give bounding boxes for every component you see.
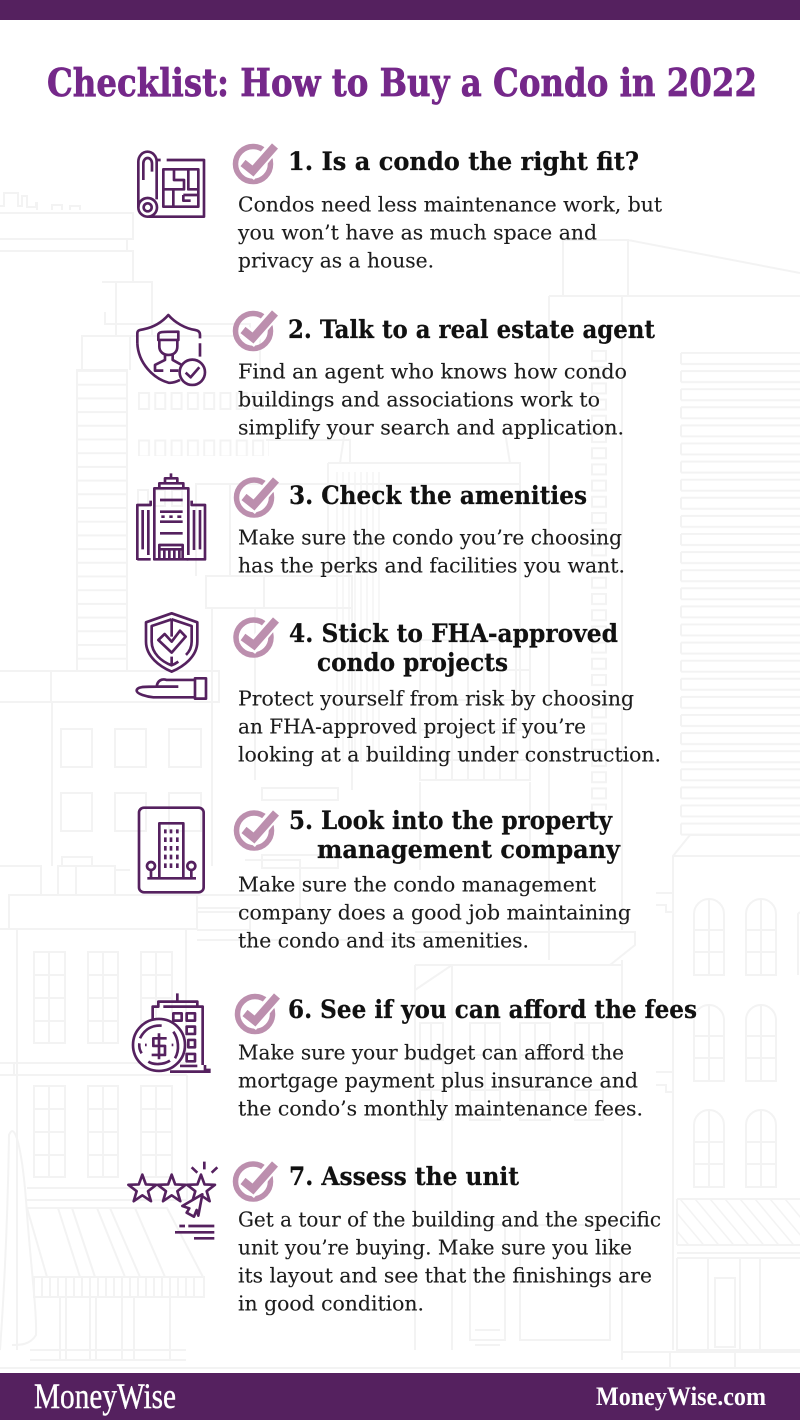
item 2: talk to a real estate agent <box>137 313 655 440</box>
icon: building in rounded frame <box>139 808 204 892</box>
body text: Make sure the condo management <box>238 872 597 896</box>
body text: the condo and its amenities. <box>238 928 529 952</box>
check mark <box>236 480 276 515</box>
body text: in good condition. <box>238 1292 424 1316</box>
body text <box>237 192 663 272</box>
top bar <box>0 0 800 20</box>
item 6: see if you can afford the fees <box>133 993 697 1120</box>
heading <box>289 806 621 864</box>
body text <box>238 360 627 440</box>
check mark <box>236 1164 275 1199</box>
item 1: is a condo the right fit <box>138 146 663 272</box>
icon: shield with agent <box>137 315 205 385</box>
body text: Make sure your budget can afford the <box>238 1040 624 1064</box>
body text: its layout and see that the finishings are <box>238 1264 652 1288</box>
logo: MoneyWise: MoneyWise <box>34 1376 176 1416</box>
body text: buildings and associations work to <box>238 388 600 412</box>
body text: an FHA-approved project if you’re <box>238 714 586 738</box>
item 5: look into the property management company <box>139 806 631 952</box>
check mark <box>236 146 275 182</box>
body text: you won’t have as much space and <box>237 220 597 244</box>
body text: Make sure the condo you’re choosing <box>238 526 622 550</box>
heading: management company <box>317 835 621 864</box>
body text: looking at a building under construction. <box>238 742 661 766</box>
check mark <box>238 996 277 1032</box>
website: MoneyWise.com: MoneyWise.com <box>596 1382 766 1411</box>
body text <box>238 686 661 766</box>
heading: 7. Assess the unit <box>289 1162 519 1191</box>
item 7: assess the unit <box>128 1162 661 1316</box>
check mark <box>236 813 276 848</box>
item 3: check the amenities <box>137 473 625 578</box>
heading: 3. Check the amenities <box>289 481 587 510</box>
body text: simplify your search and application. <box>238 416 624 440</box>
body text <box>238 1040 643 1120</box>
heading: 5. Look into the property <box>289 806 613 835</box>
icon: coin and building <box>133 993 211 1072</box>
footer band <box>0 1373 800 1420</box>
icon: office tower <box>137 473 205 560</box>
heading: 6. See if you can afford the fees <box>288 995 697 1024</box>
icon: three stars with cursor <box>128 1162 217 1238</box>
heading <box>289 619 618 677</box>
check mark <box>236 313 275 348</box>
heading: condo projects <box>317 648 508 677</box>
body text: company does a good job maintaining <box>238 900 631 924</box>
body text <box>238 872 631 952</box>
heading: 1. Is a condo the right fit? <box>288 147 639 176</box>
body text: Protect yourself from risk by choosing <box>238 686 634 710</box>
body text <box>238 1208 661 1316</box>
body text: mortgage payment plus insurance and <box>238 1068 638 1092</box>
body text: Get a tour of the building and the specific <box>238 1208 661 1232</box>
item 4: stick to FHA-approved condo projects <box>137 613 661 766</box>
body text: unit you’re buying. Make sure you like <box>238 1236 632 1260</box>
heading: 2. Talk to a real estate agent <box>288 315 655 344</box>
icon: blueprint floor plan <box>138 152 204 217</box>
body text: Find an agent who knows how condo <box>238 360 627 384</box>
body text: Condos need less maintenance work, but <box>238 192 663 216</box>
body text: the condo’s monthly maintenance fees. <box>238 1096 643 1120</box>
body text: privacy as a house. <box>238 248 434 272</box>
icon: shield over hand <box>137 613 206 699</box>
body text <box>238 526 625 578</box>
body text: has the perks and facilities you want. <box>238 554 625 578</box>
heading: 4. Stick to FHA-approved <box>289 619 618 648</box>
check mark <box>236 620 276 655</box>
